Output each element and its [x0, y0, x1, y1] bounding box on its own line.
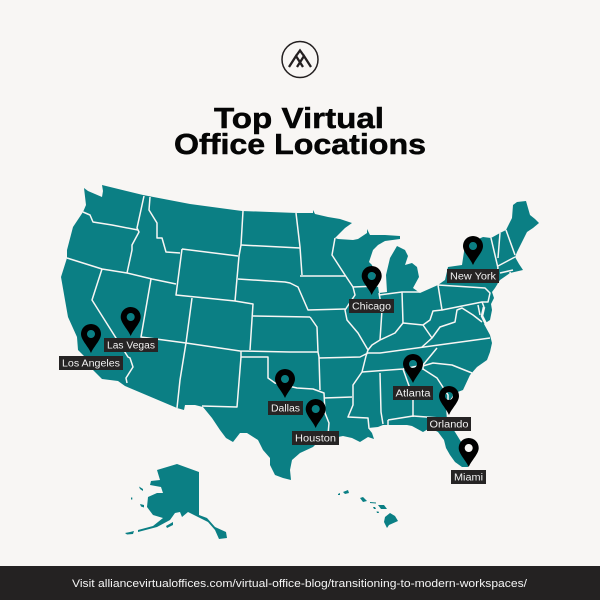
map: Hawaii [338, 490, 398, 528]
pin: Los Angeles: Los Angeles [62, 358, 120, 370]
pin: Dallas: Dallas [271, 404, 300, 414]
pin: Dallas [268, 369, 303, 415]
title [174, 103, 426, 161]
pin: Orlando [427, 386, 471, 431]
footer bar [0, 566, 600, 600]
pin: Atlanta [393, 354, 433, 400]
pin: Atlanta: Atlanta [396, 388, 431, 400]
state borders [67, 196, 515, 435]
title: Office Locations [174, 129, 426, 161]
pin: New York [447, 236, 499, 283]
title: Top Virtual [214, 103, 384, 135]
footer bar: Visit alliancevirtualoffices.com/virtual-office-blog/transitioning-to-modern-workspaces/ [72, 578, 528, 590]
map: contiguous United States [61, 185, 539, 480]
pin: Las Vegas [104, 307, 158, 352]
pin: Houston [292, 399, 339, 445]
pin: Orlando: Orlando [430, 420, 469, 430]
pin: Chicago: Chicago [352, 302, 391, 312]
pin: Miami [451, 438, 486, 484]
pin: Los Angeles [59, 324, 123, 370]
icon: company logo [282, 42, 318, 78]
pin: Chicago [349, 266, 394, 313]
pin: Houston: Houston [295, 434, 336, 444]
pin: Las Vegas: Las Vegas [107, 340, 155, 352]
map: Alaska [125, 464, 227, 539]
pin: Miami: Miami [454, 472, 483, 484]
pin: New York: New York [450, 272, 497, 282]
